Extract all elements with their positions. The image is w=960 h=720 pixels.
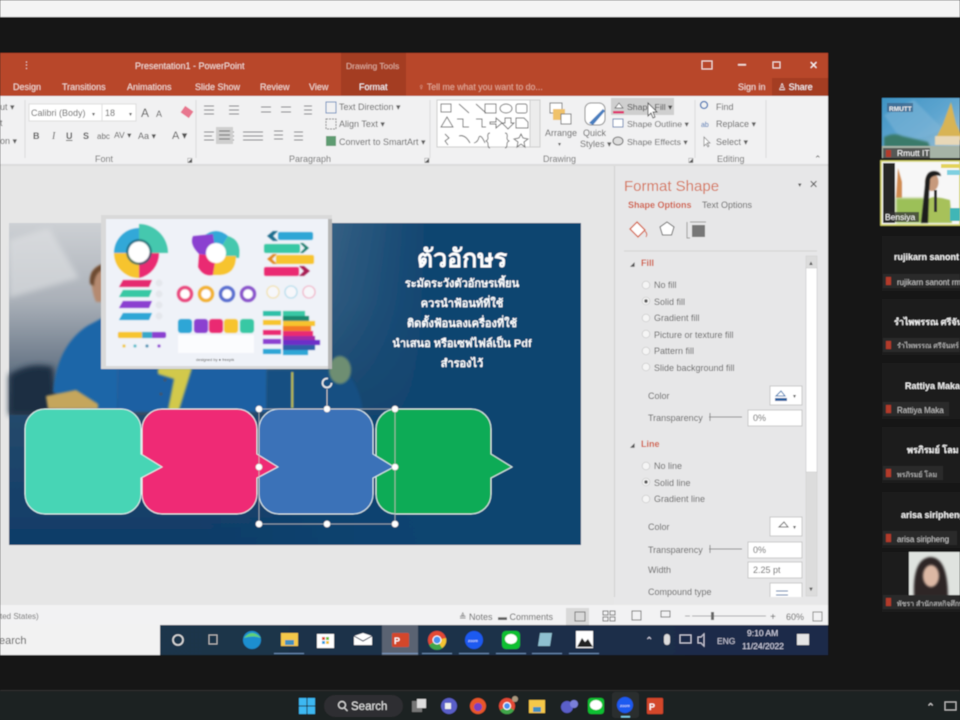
ribbon: drawing group: Quick bbox=[583, 128, 607, 138]
title bar bbox=[0, 53, 828, 96]
ribbon: font group: ▾ bbox=[129, 112, 132, 118]
slide photo bbox=[9, 223, 430, 545]
ribbon tabs: View bbox=[309, 82, 329, 92]
icon: chrome bbox=[428, 631, 446, 649]
icon: zoom bbox=[465, 631, 483, 649]
section: line: Compound type bbox=[648, 587, 712, 597]
ribbon tabs: Design bbox=[13, 82, 41, 92]
windows taskbar (remote): P bbox=[394, 636, 400, 646]
tile: Bensiya (active speaker) bbox=[881, 161, 960, 225]
tile: Rmutt IT: Rmutt IT bbox=[897, 148, 930, 158]
system tray: 11/24/2022 bbox=[742, 641, 784, 651]
ribbon: drawing group bbox=[437, 98, 694, 164]
tile: arisa: arisa siripheng bbox=[897, 535, 949, 544]
ribbon: paragraph group: Align Text ▾ bbox=[339, 119, 385, 129]
tile: arisa bbox=[882, 492, 960, 548]
app icons bbox=[412, 692, 663, 718]
tile: Rattiya: Rattiya Maka bbox=[905, 381, 960, 391]
ribbon: drawing group: ◪ bbox=[688, 158, 694, 164]
ribbon: font group: ▾ bbox=[92, 112, 95, 118]
callout: blue bbox=[259, 409, 394, 514]
status bar: ▬ Comments bbox=[498, 612, 554, 622]
title bar: Drawing Tools bbox=[346, 61, 399, 71]
ribbon tabs bbox=[13, 78, 828, 96]
app icons: P bbox=[649, 702, 655, 712]
section: line: ▾ bbox=[793, 525, 796, 531]
system tray: ⌃ bbox=[645, 636, 653, 647]
section: fill: Solid fill bbox=[654, 297, 685, 307]
ribbon: font group: A ▾ bbox=[172, 130, 188, 142]
scrollbar bbox=[806, 256, 817, 596]
thumbnail: banners bbox=[119, 280, 162, 320]
slide body text: นำเสนอ หรือเซฟไฟล์เป็น Pdf bbox=[392, 336, 532, 350]
panel: format shape: Shape Options bbox=[628, 200, 692, 210]
thumbnail: step bar bbox=[118, 332, 166, 348]
panel: zoom participants bbox=[881, 98, 960, 612]
thumbnail: arrows bbox=[264, 231, 314, 276]
windows taskbar (remote): zoom bbox=[468, 638, 478, 643]
panel: format shape: Text Options bbox=[702, 200, 753, 210]
ribbon: font group: B bbox=[33, 131, 40, 141]
tile: rujikarn bbox=[882, 236, 960, 291]
ribbon: editing group: Select ▾ bbox=[716, 137, 749, 147]
selection handles bbox=[256, 378, 398, 527]
system tray: 9:10 AM bbox=[747, 628, 778, 638]
section: fill: Slide background fill bbox=[654, 363, 735, 373]
section: fill: ▾ bbox=[793, 394, 796, 400]
panel: format shape: ▾ bbox=[798, 182, 802, 189]
ribbon: paragraph group: Convert to SmartArt ▾ bbox=[339, 137, 426, 147]
ribbon: font group: A bbox=[156, 109, 162, 119]
ribbon: editing group: ⌃ bbox=[814, 154, 822, 164]
windows taskbar (remote) bbox=[0, 625, 828, 655]
search pill: Search bbox=[351, 701, 387, 713]
icon: folder bbox=[281, 633, 298, 646]
ribbon: clipboard remnants: on ▾ bbox=[0, 136, 18, 146]
ribbon: drawing group: Styles ▾ bbox=[580, 139, 612, 149]
section: fill: ◢ bbox=[630, 262, 635, 268]
icon: edge bbox=[243, 631, 261, 649]
section: fill bbox=[630, 258, 802, 426]
search pill bbox=[324, 695, 403, 717]
slide body text: ติดตั้งฟ้อนลงเครื่องที่ใช้ bbox=[407, 315, 517, 330]
system tray bbox=[645, 628, 809, 651]
infographic thumbnail bbox=[101, 215, 332, 369]
ribbon: clipboard remnants: ut ▾ bbox=[0, 102, 15, 112]
section: line: Width bbox=[648, 565, 671, 575]
tile: Rmutt IT bbox=[882, 98, 960, 158]
ribbon: drawing group: Drawing bbox=[543, 154, 576, 164]
section: fill: Gradient fill bbox=[654, 313, 700, 323]
status bar: + bbox=[770, 612, 776, 623]
thumbnail: colour bars bbox=[263, 311, 320, 355]
slide body text: สำรองไว้ bbox=[441, 356, 483, 370]
section: line: Transparency bbox=[648, 545, 703, 555]
ribbon tabs: Slide Show bbox=[195, 82, 241, 92]
system tray: ENG bbox=[717, 636, 735, 646]
ribbon tabs: Format bbox=[359, 82, 388, 92]
ribbon tabs: ♀ Tell me what you want to do... bbox=[418, 82, 543, 92]
tile: Rattiya: Rattiya Maka bbox=[897, 406, 944, 415]
tile: video participant bbox=[882, 552, 960, 612]
slide heading: ตัวอักษร bbox=[417, 245, 508, 273]
section: line: 0% bbox=[753, 545, 766, 555]
section: line bbox=[630, 439, 802, 605]
panel: format shape bbox=[614, 166, 828, 605]
panel: powerpoint window bbox=[0, 53, 828, 655]
ribbon: font group: Font bbox=[95, 154, 114, 164]
status bar: ≜ Notes bbox=[459, 612, 493, 622]
ribbon: paragraph group: Text Direction ▾ bbox=[339, 102, 401, 112]
section: line: ◢ bbox=[630, 443, 635, 449]
ribbon: clipboard remnants: t bbox=[0, 118, 3, 128]
icon: photos bbox=[576, 631, 593, 648]
icon: mail bbox=[354, 633, 372, 645]
ribbon: editing group: Find bbox=[716, 102, 734, 112]
ribbon: font group: U bbox=[66, 131, 72, 141]
icon: notes bbox=[538, 633, 552, 646]
ribbon: font group: Aa ▾ bbox=[138, 131, 157, 141]
slide workspace bbox=[0, 166, 614, 605]
ribbon: drawing group: Shape Effects ▾ bbox=[627, 137, 688, 147]
slide body text: ระมัดระวังตัวอักษรเพี้ยน bbox=[405, 275, 520, 290]
section: line: Color bbox=[648, 522, 670, 532]
tile: rujikarn: rujikarn sanont bbox=[894, 252, 959, 262]
section: fill: Fill bbox=[641, 258, 654, 268]
icon: size bbox=[687, 222, 706, 238]
ribbon: paragraph group: ◪ bbox=[424, 158, 430, 164]
thumbnail: credit: designed by ● freepik bbox=[196, 357, 234, 362]
ribbon: editing group bbox=[700, 102, 822, 164]
ribbon: font group: A bbox=[141, 106, 149, 120]
ribbon: editing group: ab bbox=[701, 122, 709, 129]
section: line: No line bbox=[654, 461, 682, 471]
ribbon: editing group: Replace ▾ bbox=[716, 119, 757, 129]
cursor bbox=[648, 103, 657, 118]
slide body text: ควรนำฟ้อนท์ที่ใช้ bbox=[421, 295, 504, 310]
section: fill: 0% bbox=[753, 413, 766, 423]
windows 11 taskbar (local) bbox=[0, 690, 960, 720]
section: line: Gradient line bbox=[654, 494, 705, 504]
icon: line bbox=[502, 631, 520, 649]
icon: store bbox=[317, 634, 334, 648]
section: fill: Transparency bbox=[648, 413, 703, 423]
ribbon: paragraph group bbox=[204, 102, 430, 164]
tile: Rmutt IT: RMUTT bbox=[889, 106, 912, 113]
ribbon: clipboard remnants bbox=[0, 102, 18, 146]
status bar: 60% bbox=[786, 612, 804, 622]
icon: start bbox=[299, 698, 315, 714]
ribbon: font group: S bbox=[83, 131, 89, 141]
ribbon tabs: Transitions bbox=[62, 82, 106, 92]
section: line: Line bbox=[641, 439, 660, 449]
ribbon: drawing group: ▾ bbox=[558, 142, 561, 148]
tile: Rattiya bbox=[882, 363, 960, 419]
panel: format shape: Format Shape bbox=[624, 178, 719, 195]
ribbon tabs: Review bbox=[260, 82, 290, 92]
ribbon tabs: Sign in bbox=[738, 82, 766, 92]
tile: Bensiya (active speaker): Bensiya bbox=[885, 212, 916, 222]
tray: ⌃ bbox=[926, 702, 935, 714]
panel: format shape: ✕ bbox=[809, 179, 818, 191]
tile: thai name 1 bbox=[882, 299, 960, 355]
section: fill: Pattern fill bbox=[654, 346, 694, 356]
section: fill: No fill bbox=[654, 280, 677, 290]
title bar: Presentation1 - PowerPoint bbox=[135, 61, 245, 71]
ribbon: font group bbox=[29, 104, 193, 164]
ribbon bbox=[0, 96, 828, 166]
ribbon: drawing group: Shape Outline ▾ bbox=[627, 119, 689, 129]
thumbnail: petal diagram bbox=[192, 231, 240, 275]
icon: fill bbox=[630, 222, 645, 237]
title bar: ✕ bbox=[809, 60, 818, 72]
thumbnail: outline circles bbox=[267, 286, 315, 298]
top browser strip bbox=[0, 0, 960, 17]
ribbon: font group: 18 bbox=[105, 108, 115, 118]
ribbon: editing group: Editing bbox=[717, 154, 745, 164]
tile: thai name 2: พรภิรมย์ โลม bbox=[907, 444, 959, 455]
thumbnail: rounded tiles bbox=[178, 319, 254, 353]
thumbnail: donuts bbox=[178, 288, 254, 300]
ribbon tabs: Animations bbox=[127, 82, 172, 92]
section: line: Solid line bbox=[654, 478, 691, 488]
ribbon: drawing group: Shape Fill ▾ bbox=[627, 102, 673, 112]
ribbon: font group: I bbox=[51, 131, 56, 142]
ribbon tabs: ♙ Share bbox=[778, 82, 813, 92]
ribbon: font group: AV ▾ bbox=[114, 130, 132, 140]
scrollbar: ▲ bbox=[808, 261, 814, 267]
panel: slide bbox=[9, 215, 581, 545]
section: fill: Picture or texture fill bbox=[654, 330, 734, 340]
ribbon: font group: abc bbox=[97, 132, 110, 141]
tile: thai name 2 bbox=[882, 427, 960, 483]
active app bbox=[382, 625, 418, 655]
ribbon: font group: ◪ bbox=[187, 158, 193, 164]
tile: thai name 2: พรภิรมย์ โลม bbox=[897, 470, 937, 479]
ribbon: font group: Calibri (Body) bbox=[31, 108, 86, 118]
slide body text bbox=[392, 275, 532, 370]
section: fill: Color bbox=[648, 391, 670, 401]
callout: green bbox=[376, 409, 512, 514]
status bar: ted States) bbox=[0, 612, 39, 621]
tile: thai name 1: รำไพพรรณ ศรีจันทร์ bbox=[897, 341, 959, 350]
status bar bbox=[0, 605, 828, 625]
scrollbar: ▼ bbox=[808, 587, 814, 593]
icon: pentagon bbox=[660, 222, 674, 235]
callout: teal bbox=[25, 409, 162, 514]
app icons: zoom bbox=[620, 703, 630, 708]
ribbon: paragraph group: Paragraph bbox=[289, 154, 331, 164]
section: line: 2.25 pt bbox=[753, 565, 781, 575]
title bar: ⋮ bbox=[22, 60, 31, 70]
thumbnail: segmented circle bbox=[114, 224, 168, 278]
callout: pink bbox=[142, 409, 278, 514]
ribbon: drawing group: Arrange bbox=[545, 128, 577, 138]
